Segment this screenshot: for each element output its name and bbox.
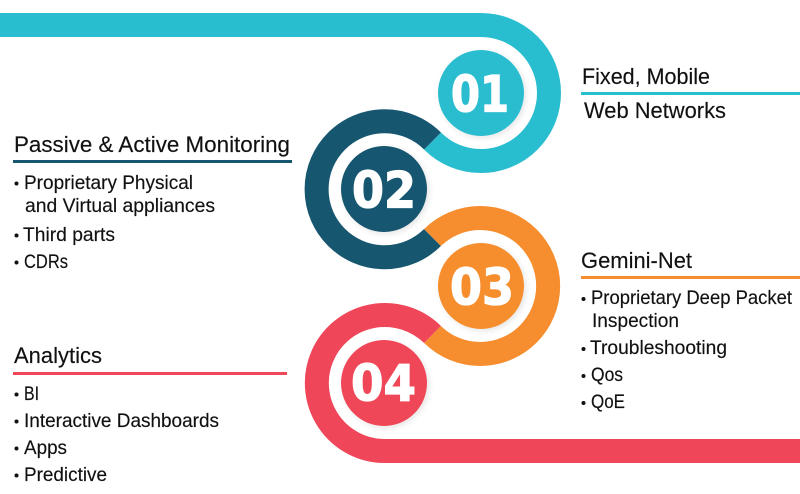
panel: Gemini-Net: QoE bbox=[591, 391, 625, 413]
panel: Analytics: BI bbox=[24, 383, 39, 405]
panel: Gemini-Net: Qos bbox=[591, 364, 623, 386]
panel: Passive &amp; Active Monitoring bbox=[13, 132, 292, 273]
panel: Gemini-Net: Gemini-Net bbox=[581, 248, 692, 273]
panel: Passive &amp; Active Monitoring: Passive & Active Monitoring bbox=[14, 132, 290, 157]
badge 02 bbox=[341, 146, 427, 232]
panel: Gemini-Net bbox=[581, 248, 800, 413]
panel: Analytics: Predictive bbox=[24, 464, 107, 486]
badge 03 bbox=[438, 243, 524, 329]
panel: Passive &amp; Active Monitoring: and Virtual appliances bbox=[25, 195, 215, 217]
panel: Gemini-Net: Troubleshooting bbox=[590, 337, 727, 359]
panel: Fixed, Mobile / Web Networks: Fixed, Mobile bbox=[582, 64, 710, 89]
badge 04: 04 bbox=[351, 354, 416, 412]
panel: Passive &amp; Active Monitoring: Third parts bbox=[23, 224, 115, 246]
panel: Analytics: Apps bbox=[24, 437, 67, 459]
panel: Analytics: Interactive Dashboards bbox=[24, 410, 219, 432]
badge 02: 02 bbox=[352, 162, 416, 220]
badge 01 bbox=[438, 50, 524, 136]
ribbon segment 04 bbox=[317, 315, 800, 451]
panel: Fixed, Mobile / Web Networks: Web Networks bbox=[584, 98, 726, 123]
panel: Analytics bbox=[13, 343, 287, 486]
ribbon segment 02 bbox=[317, 121, 432, 257]
ribbon segment 01 bbox=[0, 25, 549, 161]
panel: Passive &amp; Active Monitoring: Proprietary Physical bbox=[24, 172, 193, 194]
badge 01: 01 bbox=[451, 66, 509, 124]
ribbon segment 03 bbox=[432, 218, 548, 354]
panel: Gemini-Net: Inspection bbox=[592, 310, 679, 332]
panel: Analytics: Analytics bbox=[14, 343, 102, 368]
badge 04 bbox=[341, 340, 427, 426]
badge 03: 03 bbox=[450, 258, 514, 316]
panel: Fixed, Mobile / Web Networks bbox=[581, 64, 800, 123]
panel: Gemini-Net: Proprietary Deep Packet bbox=[591, 287, 793, 309]
panel: Passive &amp; Active Monitoring: CDRs bbox=[24, 251, 68, 273]
